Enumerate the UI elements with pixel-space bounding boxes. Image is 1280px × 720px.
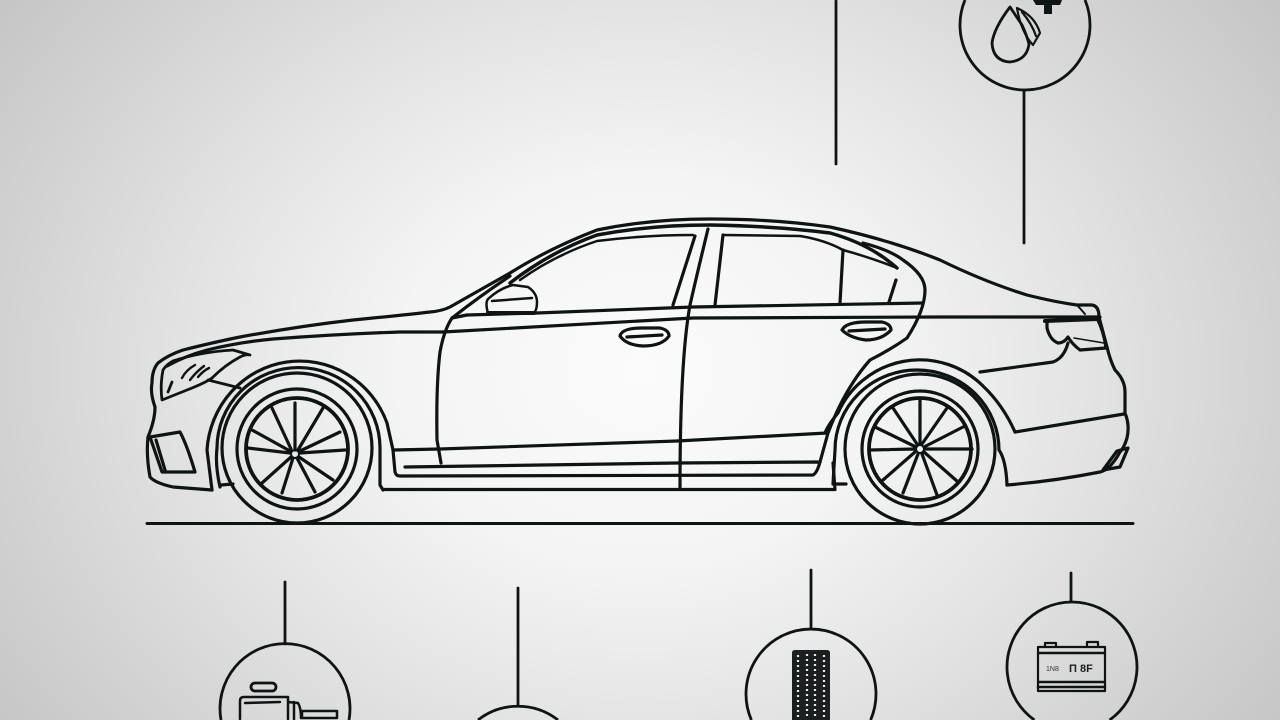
front wheel (222, 373, 372, 523)
front door edge (437, 315, 467, 463)
battery label: Π 8F (1069, 663, 1093, 675)
exhaust (1103, 448, 1128, 470)
spoiler (1077, 305, 1085, 314)
icon: reservoir (240, 697, 301, 719)
brake icon group (478, 588, 558, 720)
battery icon group (1007, 573, 1137, 720)
door handle front (620, 328, 669, 346)
window sill line (467, 303, 923, 315)
leader line (517, 588, 519, 706)
icon: battery (1038, 642, 1105, 691)
side mirror (486, 285, 537, 313)
door handle rear (842, 322, 891, 340)
icon: tyre tread (792, 650, 830, 720)
circle: partial bottom (478, 706, 558, 720)
engine icon group (220, 582, 350, 720)
hood crease (167, 332, 443, 366)
rear door and C pillar (820, 243, 925, 462)
tail light (1047, 318, 1106, 350)
windshield base (452, 276, 510, 318)
icon: plus (1033, 0, 1062, 14)
pillar lines (673, 229, 896, 488)
rear wheel arch (825, 360, 1015, 433)
circle: battery (1007, 602, 1137, 720)
icon: rod (302, 711, 337, 718)
front wheel arch (207, 361, 393, 490)
leader line (1023, 90, 1025, 243)
tyre icon group (746, 570, 876, 720)
circle: tyre (746, 629, 876, 720)
icon: cap (251, 683, 276, 691)
headlight (161, 350, 250, 400)
car side view (147, 219, 1128, 524)
belt line (443, 317, 1100, 332)
battery label: 1N8 (1046, 666, 1059, 673)
rear bumper line (1015, 414, 1124, 432)
leader line (810, 570, 812, 628)
rear quarter line (980, 343, 1068, 372)
leader line (284, 582, 286, 644)
ground line (147, 522, 1133, 525)
icon: leaf (1017, 8, 1040, 45)
fluid icon group (960, 0, 1090, 243)
rear wheel (845, 374, 995, 524)
circle: fluid (960, 0, 1090, 90)
circle: engine (220, 644, 350, 720)
car body silhouette (147, 219, 1128, 490)
icon: oil drop (992, 7, 1029, 62)
leader line top centre (835, 1, 837, 164)
leader line (1070, 573, 1072, 601)
roof inner lines (510, 225, 897, 283)
front fog lamp (150, 432, 195, 472)
sill lines (383, 433, 835, 490)
